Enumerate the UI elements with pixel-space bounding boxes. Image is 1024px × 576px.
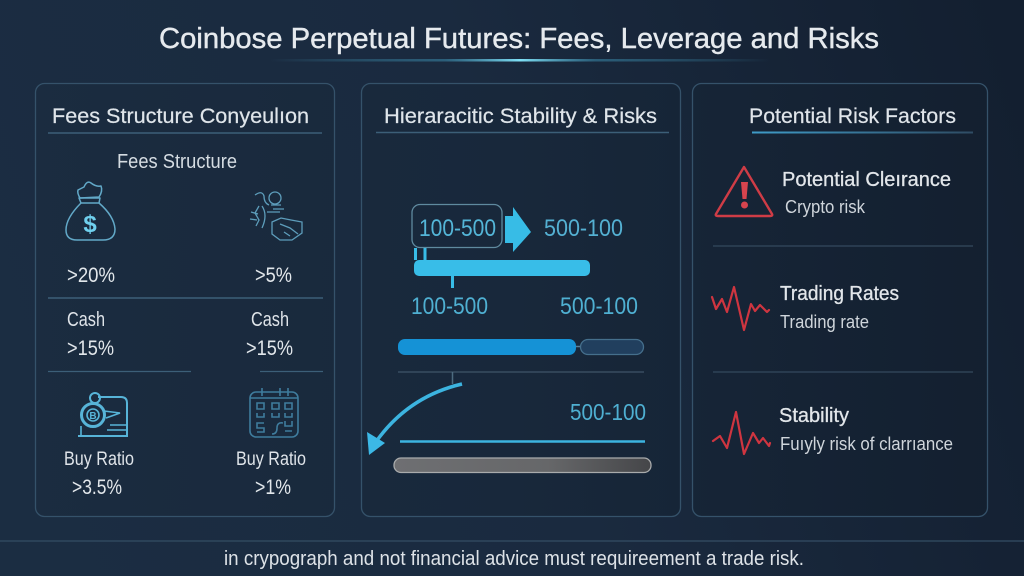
range box: 100-500: [412, 204, 502, 248]
bar: blue with remainder: [398, 339, 644, 355]
icon: coin card: [78, 393, 127, 436]
risk: potential clearance: [716, 167, 951, 217]
icon: handshake and people: [250, 192, 302, 240]
stat: >3.5%: >3.5%: [72, 476, 122, 499]
stat: >5%: >5%: [255, 264, 292, 287]
stat: >1%: >1%: [255, 476, 291, 499]
risk: stability: Stability: [779, 404, 850, 427]
label: buy ratio right: Buy Ratio: [236, 449, 306, 470]
label: 500-100 bottom: 500-100: [570, 399, 646, 425]
label: cash left: Cash: [67, 309, 105, 331]
icon: money bag: $: [83, 211, 97, 238]
panel heading: potential risk factors: Potential Risk Factors: [749, 104, 956, 128]
risk: potential clearance: Crypto risk: [785, 196, 866, 217]
icon: money bag: [66, 182, 115, 240]
label: buy ratio left: Buy Ratio: [64, 449, 134, 470]
panel: fees structure: [36, 84, 334, 516]
label: cash right: Cash: [251, 309, 289, 331]
bar: light blue: [414, 248, 590, 288]
title: Coinbose Perpetual Futures: Fees, Leverage and Risks: [159, 23, 879, 55]
footer disclaimer: in crypograph and not financial advice must requireement a trade risk.: [224, 548, 804, 570]
icon: pulse line: [712, 287, 769, 330]
risk: stability: [713, 404, 953, 454]
panel: potential risk factors: [692, 84, 988, 516]
panel: hierarchic stability: [362, 84, 680, 516]
label: 100-500 mid: 100-500: [411, 293, 488, 320]
icon: coin card: B: [89, 411, 97, 422]
risk: trading rates: Trading rate: [780, 311, 869, 332]
icon: calendar: [250, 388, 298, 437]
stat: >15% left: >15%: [67, 337, 114, 360]
bar: gray: [394, 458, 651, 472]
label: 500-100 top: 500-100: [544, 215, 623, 242]
risk: potential clearance: Potential Cleırance: [782, 168, 951, 191]
sub-heading: fees structure: Fees Structure: [117, 151, 237, 173]
arrow: curved down-left: [367, 384, 462, 455]
icon: pulse line: [713, 412, 770, 454]
risk: trading rates: [712, 282, 899, 332]
risk: stability: Fuıyly risk of clarrıance: [780, 433, 953, 454]
panel heading: fees structure conversion: Fees Structure Conyeulıon: [52, 104, 309, 128]
icon: warning triangle: [716, 167, 772, 216]
stat: >20%: >20%: [67, 264, 115, 287]
stat: >15% right: >15%: [246, 337, 293, 360]
label: 500-100 mid: 500-100: [560, 293, 638, 320]
risk: trading rates: Trading Rates: [780, 282, 899, 305]
panel heading: stability and risks: Hieraracitic Stability & Risks: [384, 104, 657, 128]
range box: 100-500: 100-500: [419, 215, 496, 242]
arrow: right block arrow: [505, 207, 531, 252]
